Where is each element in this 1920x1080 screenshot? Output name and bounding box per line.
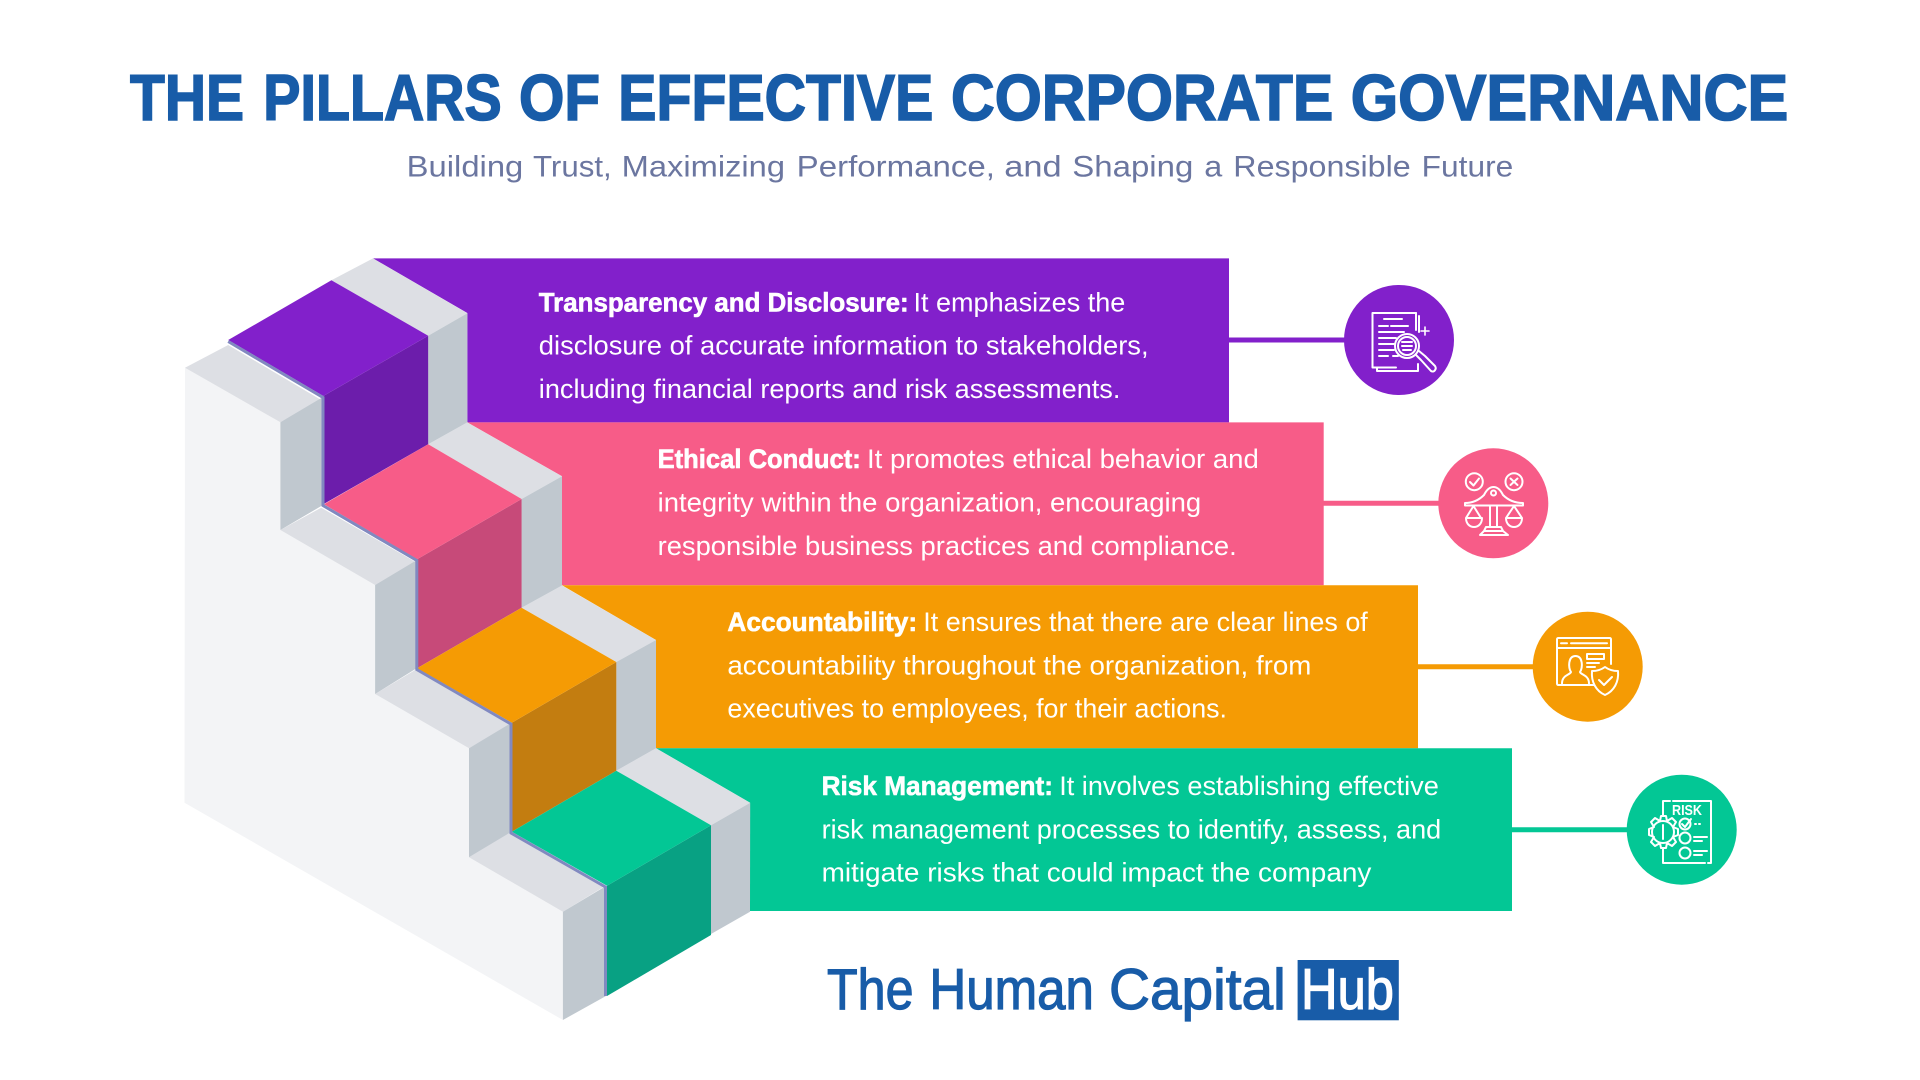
text: risk management: Risk Management: [822,771,1053,801]
icon: risk checklist with gear [1627,775,1737,885]
title: CORPORATE [951,62,1333,134]
title [130,62,1788,134]
subtitle: Responsible [1233,151,1411,184]
title: GOVERNANCE [1351,62,1788,134]
logo: The Human Capital Hub: Capital [1109,958,1286,1022]
panel: accountability [562,585,1418,748]
text: transparency and disclosure: It emphasizes the [914,287,1125,317]
text: accountability: accountability throughout the organization, from [727,650,1311,680]
title: EFFECTIVE [618,62,933,134]
text: transparency and disclosure: disclosure of accurate information to stakeholders, [539,331,1149,361]
icon: document with magnifier [1344,285,1454,395]
connector: pink [1323,501,1440,506]
panel: ethical conduct [467,422,1324,585]
text: risk management: It involves establishing effective [1059,771,1439,801]
title: PILLARS [263,62,502,134]
text: accountability: executives to employees, for their actions. [727,694,1227,724]
text: accountability: Accountability: [727,607,917,637]
staircase illustration [184,258,750,1020]
text: transparency and disclosure [539,287,1149,404]
subtitle: Performance, [797,151,995,184]
text: risk management [822,771,1441,888]
subtitle: Future [1422,151,1513,184]
subtitle: Maximizing [622,151,785,184]
risk label: RISK [1672,803,1702,819]
icon: profile with shield [1533,612,1643,722]
connector: orange [1418,664,1535,669]
text: ethical conduct: It promotes ethical behavior and [867,444,1259,474]
right grey treads [331,258,750,825]
step fronts [323,336,711,996]
left step risers [280,397,606,1020]
stair body [184,368,563,1020]
subtitle [407,151,1513,184]
title: THE [130,62,244,134]
text: risk management: risk management processes to identify, assess, and [822,814,1441,844]
text: ethical conduct: Ethical Conduct: [658,444,861,474]
connector: green [1512,827,1630,832]
logo: The Human Capital Hub: Hub [1301,958,1394,1022]
subtitle: Trust, [533,151,612,184]
text: ethical conduct: responsible business practices and compliance. [658,531,1237,561]
connector: purple [1229,338,1345,342]
title: OF [519,62,600,134]
step seam line [228,342,605,996]
logo: The Human Capital Hub [827,958,1399,1022]
text: risk management: mitigate risks that could impact the company [822,858,1372,888]
text: ethical conduct [658,444,1259,561]
subtitle: Building [407,151,523,184]
left step treads [185,345,604,912]
subtitle: Shaping [1072,151,1193,184]
right grey risers [428,313,750,934]
text: transparency and disclosure: including financial reports and risk assessments. [539,374,1120,404]
text: accountability: It ensures that there are clear lines of [923,607,1368,637]
subtitle: a [1204,151,1223,184]
text: ethical conduct: integrity within the organization, encouraging [658,487,1201,517]
text: accountability [727,607,1368,724]
panel: transparency and disclosure [373,258,1229,422]
step tops [228,280,711,886]
subtitle: and [1004,151,1062,184]
panel: risk management [656,748,1512,911]
icon: scales [1438,448,1548,558]
text: transparency and disclosure: Transparency and Disclosure: [539,287,909,317]
logo: The Human Capital Hub: The [827,958,914,1022]
logo: The Human Capital Hub: Human [929,958,1094,1022]
